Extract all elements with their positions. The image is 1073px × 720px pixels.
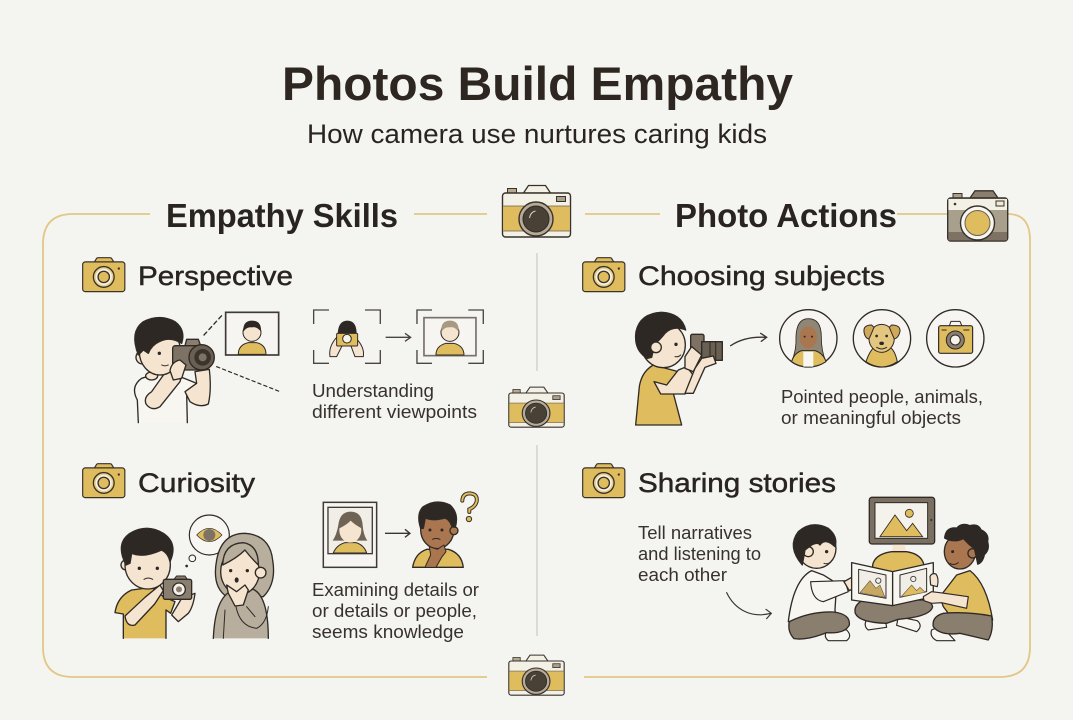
illustration: three children sharing a photo book [788, 524, 993, 641]
arrow [727, 593, 771, 619]
icon: sharing stories camera [583, 464, 625, 498]
illustration: tablet with landscape [869, 497, 935, 544]
center divider [536, 253, 538, 636]
arrow [731, 333, 767, 346]
rounded frame [43, 214, 1030, 677]
icon: top right grey camera [948, 191, 1008, 241]
right child [923, 524, 993, 641]
middle child [855, 545, 933, 632]
illustration: boy with camera and thought bubble [115, 515, 229, 638]
icon: bottom camera [509, 655, 564, 695]
text: perspective description: Understanding [312, 381, 434, 401]
illustration: thinking girl [213, 533, 274, 638]
photo book [852, 563, 938, 606]
icon: curiosity camera [83, 464, 125, 498]
text: curiosity description: seems knowledge [312, 622, 464, 642]
text: curiosity description: Examining details or [312, 580, 479, 600]
heading: Curiosity: Curiosity [138, 468, 256, 498]
icon: perspective camera [83, 258, 125, 292]
heading: Perspective: Perspective [138, 261, 293, 291]
text: perspective description: different viewpoints [312, 402, 477, 422]
icon: middle camera [509, 387, 564, 427]
heading: Empathy Skills: Empathy Skills [166, 197, 398, 234]
illustration: boy with camera [134, 316, 280, 423]
text: sharing stories description: and listening to [638, 544, 761, 564]
panel: Sharing stories [583, 464, 993, 641]
icon: choosing subjects camera [583, 258, 625, 292]
text: sharing stories description: each other [638, 565, 727, 585]
icon: top center camera [502, 186, 570, 237]
heading: Choosing subjects: Choosing subjects [638, 261, 885, 291]
heading: Photo Actions: Photo Actions [675, 197, 897, 234]
illustration: viewpoint photo [226, 312, 279, 355]
title: Photos Build Empathy [282, 57, 793, 110]
illustration: thinking boy with question mark [413, 493, 477, 567]
text: choosing subjects description: or meaningful objects [781, 408, 961, 428]
arrow [385, 529, 410, 537]
icon: dog circle [853, 310, 911, 367]
illustration: framed child to framed portrait [314, 310, 483, 363]
text: sharing stories description: Tell narratives [638, 523, 752, 543]
heading: Sharing stories: Sharing stories [638, 468, 836, 498]
text: choosing subjects description: Pointed people, animals, [781, 387, 983, 407]
left child [788, 525, 860, 641]
subtitle: How camera use nurtures caring kids [307, 119, 767, 149]
icon: person circle [780, 310, 837, 367]
panel: Curiosity [83, 464, 479, 642]
panel: Perspective [83, 258, 483, 423]
text: curiosity description: or details or people, [312, 601, 477, 621]
illustration: polaroid portrait [323, 502, 377, 567]
icon: camera circle [927, 310, 984, 367]
panel: Choosing subjects [583, 258, 984, 428]
illustration: boy photographing [636, 312, 722, 425]
